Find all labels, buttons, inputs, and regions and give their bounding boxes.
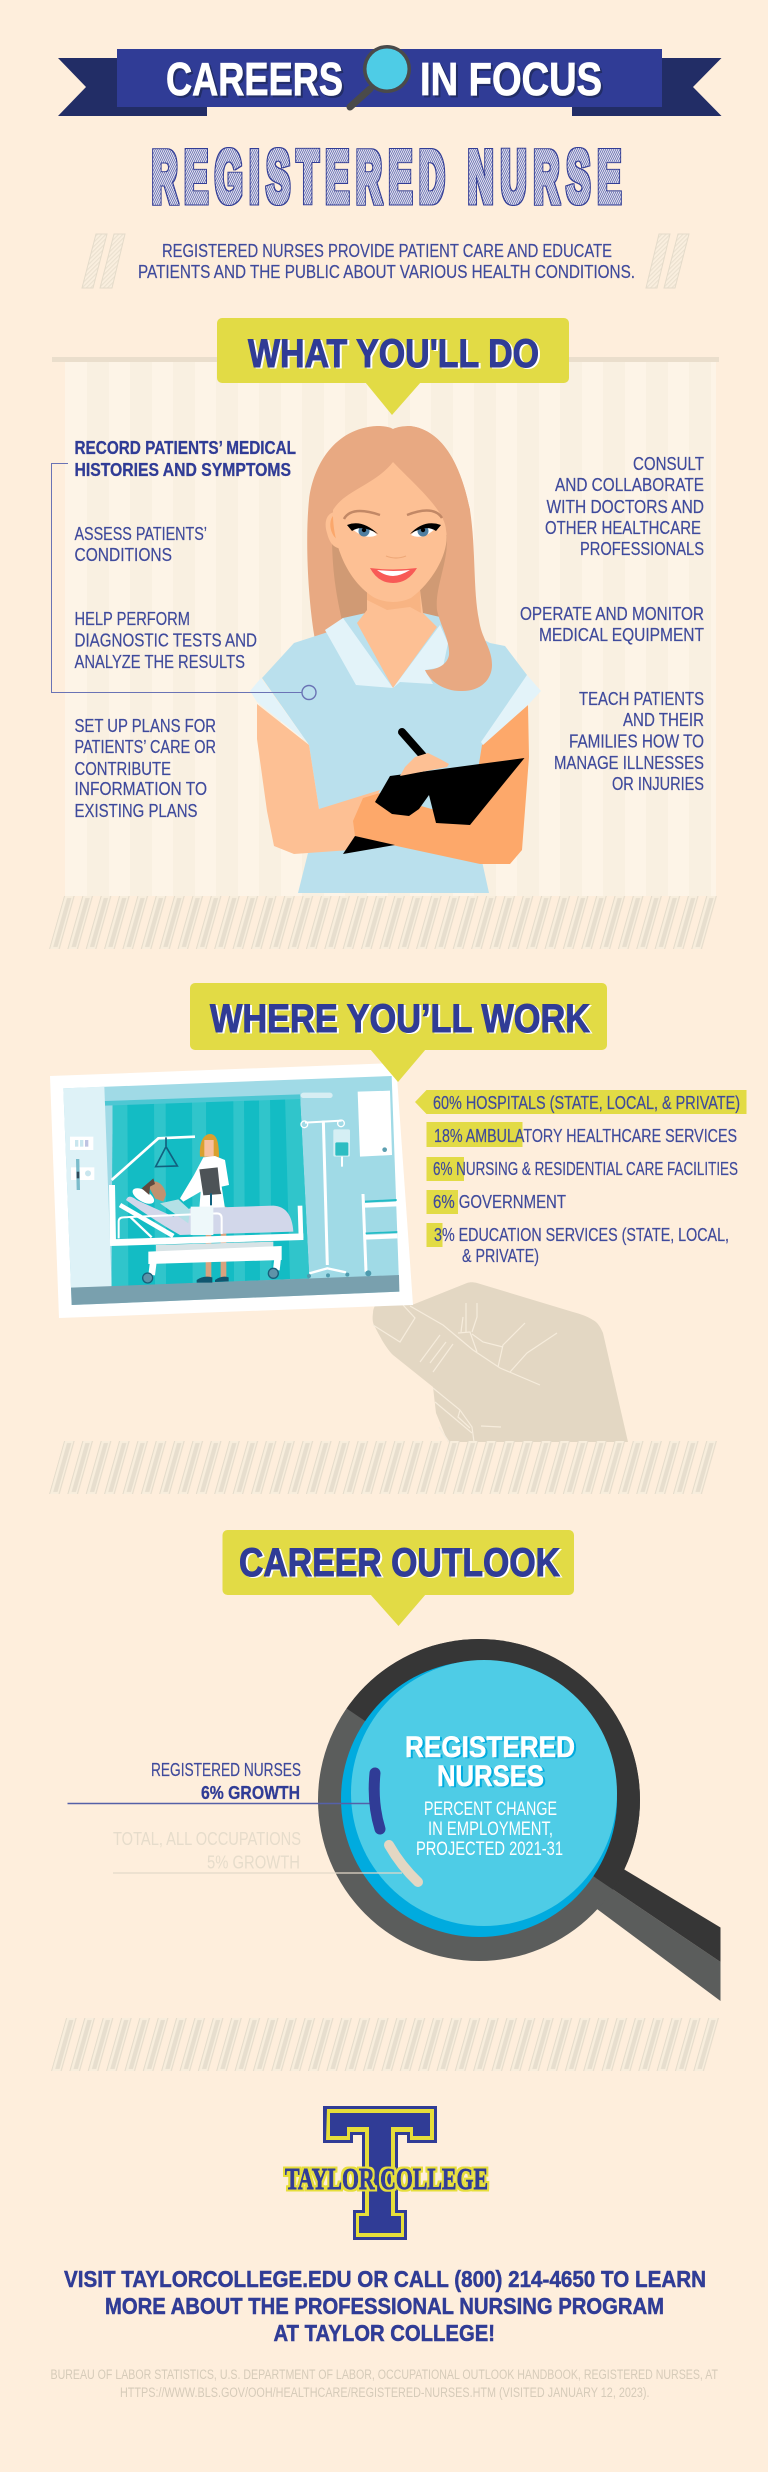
duty 5: PROFESSIONALS xyxy=(580,539,704,559)
brows xyxy=(344,511,380,519)
face xyxy=(333,462,447,602)
ear xyxy=(326,512,342,549)
label: all occupations xyxy=(113,1829,301,1872)
eyes xyxy=(347,523,441,537)
illustration: nurse xyxy=(250,426,541,893)
duty 3: HELP PERFORM xyxy=(74,609,190,629)
duty 5: WITH DOCTORS AND xyxy=(546,497,704,517)
source note xyxy=(50,2367,718,2400)
duty 6: OPERATE AND MONITOR xyxy=(520,604,704,624)
logo: taylor college xyxy=(285,2106,488,2240)
duty 5: CONSULT xyxy=(633,454,704,474)
hair back xyxy=(307,426,470,640)
header title left: CAREERS xyxy=(166,53,343,105)
duty 4: INFORMATION TO xyxy=(74,779,207,799)
intro text xyxy=(138,241,635,282)
connector line with marker xyxy=(52,464,316,700)
duty 2 xyxy=(74,524,207,565)
duty 7: TEACH PATIENTS xyxy=(579,689,704,709)
hair front lock xyxy=(405,426,492,691)
call to action: MORE ABOUT THE PROFESSIONAL NURSING PROGRAM xyxy=(105,2293,664,2319)
magnifier body xyxy=(318,1639,720,2001)
wall fixtures xyxy=(70,1137,94,1190)
curtain xyxy=(105,1095,330,1287)
striped divider 2 xyxy=(49,1441,718,1494)
call to action xyxy=(64,2266,706,2346)
duty 2: ASSESS PATIENTS’ xyxy=(74,524,207,544)
striped divider 1 xyxy=(49,896,718,949)
decorative slashes left xyxy=(82,234,125,288)
row: government 6%: 6% GOVERNMENT xyxy=(433,1192,566,1212)
arc and leader: registered nurses xyxy=(68,1773,380,1829)
duty 4: CONTRIBUTE xyxy=(74,759,171,779)
call to action: VISIT TAYLORCOLLEGE.EDU OR CALL (800) 214-4650 TO LEARN xyxy=(64,2266,706,2292)
sleeve cuffs xyxy=(250,678,309,745)
cabinet xyxy=(358,1091,392,1157)
patient xyxy=(130,1178,190,1223)
bed frame xyxy=(110,1185,303,1283)
neck xyxy=(357,590,437,688)
doctor xyxy=(180,1134,229,1283)
duty 5 xyxy=(545,454,704,559)
row: education 3%: & PRIVATE) xyxy=(462,1246,539,1266)
chart: magnifier with growth arcs xyxy=(68,1639,720,2001)
lens title xyxy=(405,1731,575,1793)
source note: HTTPS://WWW.BLS.GOV/OOH/HEALTHCARE/REGISTERED-NURSES.HTM (VISITED JANUARY 12, 2023). xyxy=(120,2385,650,2400)
duty 7: OR INJURIES xyxy=(612,774,704,794)
duty 2: CONDITIONS xyxy=(74,545,172,565)
illustration: hospital photo xyxy=(50,1063,413,1318)
duty 5: OTHER HEALTHCARE xyxy=(545,518,701,538)
duty 7: FAMILIES HOW TO xyxy=(569,732,704,752)
list: duties left xyxy=(74,438,296,821)
duty 7: AND THEIR xyxy=(623,710,704,730)
lens caption: IN EMPLOYMENT, xyxy=(428,1819,553,1840)
lens caption: PERCENT CHANGE xyxy=(424,1799,557,1820)
lens title: NURSES xyxy=(437,1760,544,1793)
duty 4: EXISTING PLANS xyxy=(74,801,198,821)
nose xyxy=(386,556,406,558)
room wall xyxy=(63,1076,399,1305)
mouth xyxy=(370,568,417,583)
duty 4: SET UP PLANS FOR xyxy=(74,716,216,736)
duty 5: AND COLLABORATE xyxy=(555,475,704,495)
bed blanket xyxy=(126,1197,293,1235)
label: registered nurses: 6% GROWTH xyxy=(201,1783,300,1803)
duty 4 xyxy=(74,716,216,821)
pen and hand xyxy=(400,732,449,776)
row: education 3% xyxy=(426,1223,729,1266)
arc and leader: all occupations xyxy=(113,1845,418,1882)
shirt xyxy=(262,611,527,893)
duty 7: MANAGE ILLNESSES xyxy=(554,753,704,773)
intro text: REGISTERED NURSES PROVIDE PATIENT CARE AND EDUCATE xyxy=(162,241,612,261)
label: registered nurses: REGISTERED NURSES xyxy=(151,1760,301,1780)
decorative slashes right xyxy=(646,234,689,288)
logo: taylor college: TAYLOR COLLEGE xyxy=(285,2161,488,2196)
header ribbon xyxy=(58,45,722,116)
duty 4: PATIENTS’ CARE OR xyxy=(74,737,216,757)
floor xyxy=(71,1275,399,1305)
duty 3: DIAGNOSTIC TESTS AND xyxy=(74,630,257,650)
heading: what you'll do xyxy=(217,318,569,415)
intro text: PATIENTS AND THE PUBLIC ABOUT VARIOUS HEALTH CONDITIONS. xyxy=(138,262,635,282)
call to action: AT TAYLOR COLLEGE! xyxy=(274,2320,495,2346)
title: registered nurse xyxy=(152,137,629,219)
duty 1: RECORD PATIENTS’ MEDICAL xyxy=(74,438,296,458)
duty 1: HISTORIES AND SYMPTOMS xyxy=(74,460,291,480)
icon: magnifying glass xyxy=(350,45,411,107)
trapeze rod xyxy=(112,1137,195,1180)
duty 6: MEDICAL EQUIPMENT xyxy=(539,625,704,645)
label: all occupations: 5% GROWTH xyxy=(207,1852,300,1872)
title: registered nurse: NURSE xyxy=(468,137,629,219)
duty 3: ANALYZE THE RESULTS xyxy=(74,652,245,672)
heading: where you'll work xyxy=(190,983,607,1082)
panel: striped backdrop xyxy=(52,357,719,896)
header title right: IN FOCUS xyxy=(420,53,602,105)
duty 7 xyxy=(554,689,704,794)
lens caption xyxy=(416,1799,563,1860)
heading: career outlook: CAREER OUTLOOK xyxy=(239,1541,560,1585)
illustration: hand xyxy=(373,1282,628,1442)
list: duties right xyxy=(520,454,704,794)
list: where nurses work xyxy=(415,1090,746,1266)
left arm xyxy=(257,704,380,854)
right arm xyxy=(353,705,529,864)
duty 3 xyxy=(74,609,257,672)
striped divider 3 xyxy=(51,2018,720,2071)
label: all occupations: TOTAL, ALL OCCUPATIONS xyxy=(113,1829,301,1849)
row: government 6% xyxy=(426,1190,566,1214)
collar xyxy=(325,618,393,688)
iv stand xyxy=(301,1120,350,1278)
duty 6 xyxy=(520,604,704,645)
heading: where you'll work: WHERE YOU’LL WORK xyxy=(210,997,590,1041)
clipboard xyxy=(343,758,524,854)
lens caption: PROJECTED 2021-31 xyxy=(416,1839,563,1860)
label: registered nurses xyxy=(151,1760,301,1803)
heading: career outlook xyxy=(222,1530,574,1626)
duty 1 xyxy=(74,438,296,480)
heading: what you'll do: WHAT YOU'LL DO xyxy=(248,332,539,376)
title: registered nurse: REGISTERED xyxy=(152,137,452,219)
side shelf xyxy=(363,1194,397,1276)
lens title: REGISTERED xyxy=(405,1731,575,1764)
